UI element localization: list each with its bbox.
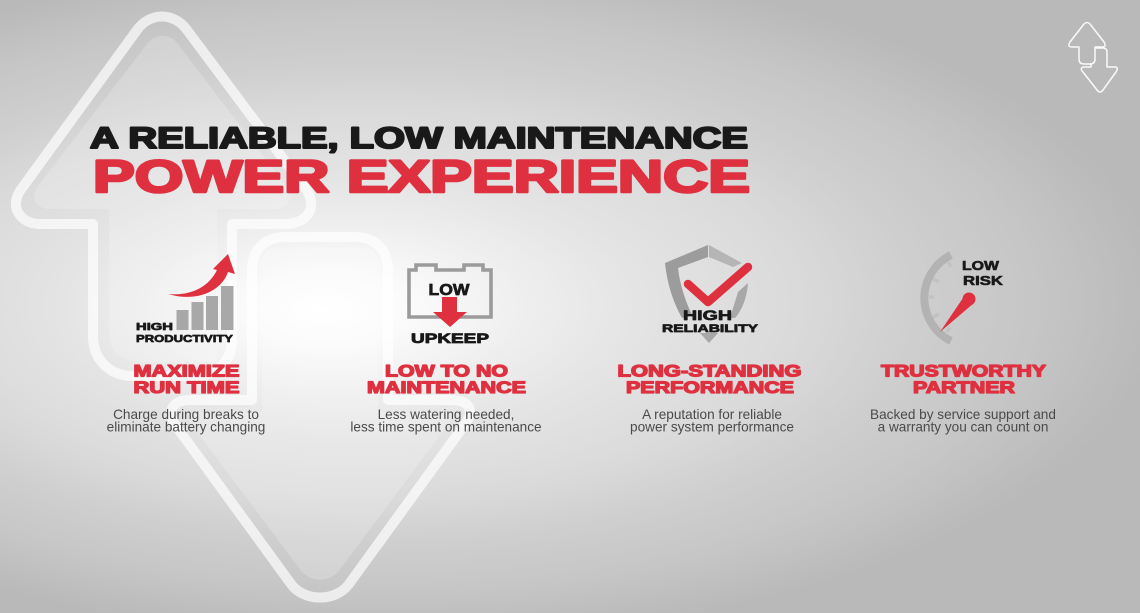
column: trustworthy partner — [870, 362, 1056, 434]
label: upkeep: UPKEEP — [411, 331, 489, 346]
description: Charge during breaks to — [113, 407, 259, 422]
description — [630, 407, 794, 434]
icon: high productivity — [136, 254, 235, 345]
icon: low risk gauge — [924, 255, 1003, 341]
description — [870, 407, 1056, 434]
heading: LOW TO NO — [385, 362, 508, 380]
heading: MAINTENANCE — [367, 379, 526, 397]
description: eliminate battery changing — [107, 420, 265, 434]
column: low to no maintenance — [350, 362, 542, 434]
heading: TRUSTWORTHY — [881, 362, 1046, 380]
heading: MAXIMIZE — [134, 362, 240, 380]
bar chart — [176, 286, 234, 330]
description: less time spent on maintenance — [350, 420, 542, 434]
background outline arrows — [16, 16, 470, 598]
needle — [940, 295, 974, 332]
icon: low upkeep — [409, 265, 491, 346]
shield — [665, 245, 708, 318]
description: Less watering needed, — [378, 407, 514, 422]
heading — [134, 362, 240, 397]
column: maximize run time — [107, 362, 265, 434]
icon: high reliability shield — [662, 245, 759, 343]
gauge ticks — [928, 262, 951, 332]
label: productivity: PRODUCTIVITY — [136, 333, 233, 345]
label: high: HIGH — [136, 321, 173, 333]
heading — [618, 362, 802, 397]
description — [107, 407, 265, 434]
heading — [881, 362, 1046, 397]
description: Backed by service support and — [870, 407, 1056, 422]
heading: PERFORMANCE — [626, 379, 794, 397]
label: high: HIGH — [683, 308, 732, 323]
gauge arc — [924, 255, 951, 341]
description: a warranty you can count on — [878, 420, 1048, 434]
label: low: LOW — [962, 259, 999, 273]
column: long-standing performance — [618, 362, 802, 434]
title — [90, 122, 750, 202]
label: reliability: RELIABILITY — [662, 323, 759, 335]
heading: RUN TIME — [134, 379, 240, 397]
description: power system performance — [630, 420, 794, 434]
title line 2: POWER EXPERIENCE — [93, 151, 750, 202]
rising arrow — [168, 254, 235, 297]
large down arrow inner fill — [189, 248, 454, 580]
large up arrow inner fill — [34, 36, 290, 362]
icon: small up and down arrows logo — [1069, 22, 1117, 92]
battery outline — [409, 265, 491, 317]
down arrow — [433, 297, 467, 327]
label: low: LOW — [428, 282, 470, 299]
description — [350, 407, 542, 434]
large up arrow outline — [16, 16, 311, 376]
heading — [367, 362, 526, 397]
label: risk: RISK — [963, 274, 1003, 288]
heading: LONG-STANDING — [618, 362, 802, 380]
description: A reputation for reliable — [642, 407, 782, 422]
check mark — [688, 267, 748, 302]
large down arrow outline — [171, 237, 470, 598]
heading: PARTNER — [913, 379, 1015, 397]
title line 1: A RELIABLE, LOW MAINTENANCE — [90, 122, 748, 155]
